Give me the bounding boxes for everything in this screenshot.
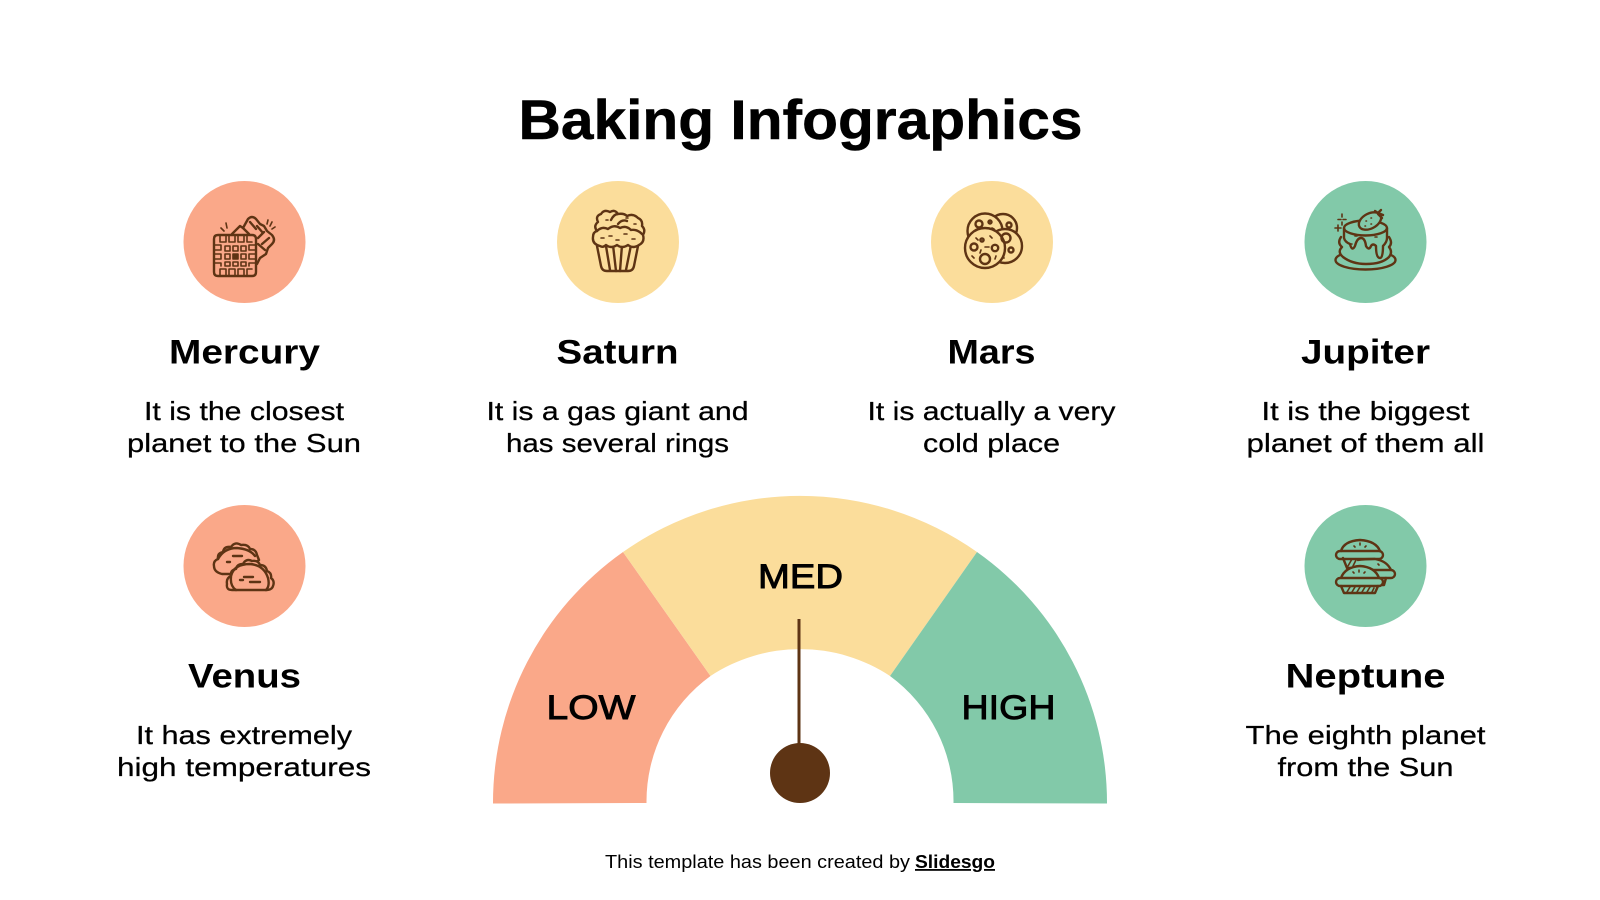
description: It is a gas giant and	[486, 396, 748, 426]
label: high: HIGH	[962, 689, 1056, 727]
heading: Venus	[188, 658, 301, 696]
icon: waffle	[184, 181, 306, 303]
icon: cookies	[931, 181, 1053, 303]
gauge segment: low	[493, 552, 710, 804]
description: The eighth planet	[1246, 720, 1486, 750]
icon: pies	[1304, 505, 1426, 627]
description line 2: high temperatures	[117, 752, 371, 782]
heading: Mercury	[169, 334, 320, 372]
panel: Jupiter	[1246, 181, 1484, 458]
icon: pancakes with strawberry	[1304, 181, 1426, 303]
footer credit	[605, 852, 995, 872]
description line 2: cold place	[923, 428, 1060, 458]
heading: Saturn	[556, 334, 678, 372]
heading: Jupiter	[1301, 334, 1430, 372]
heading: Neptune	[1286, 658, 1446, 696]
label: med: MED	[758, 558, 843, 596]
heading: Mars	[948, 334, 1036, 372]
panel: Saturn	[486, 181, 748, 458]
panel: Neptune	[1246, 505, 1486, 782]
panel: Mars	[868, 181, 1116, 458]
icon: dumplings	[184, 505, 306, 627]
gauge chart	[493, 496, 1107, 804]
description line 2: from the Sun	[1278, 752, 1454, 782]
panel: Mercury	[127, 181, 361, 458]
gauge segment: med	[623, 496, 977, 676]
footer link: Slidesgo	[915, 852, 995, 872]
gauge segment: high	[890, 552, 1107, 804]
description line 2: has several rings	[506, 428, 729, 458]
icon: muffin	[557, 181, 679, 303]
description: It is the closest	[144, 396, 345, 426]
label: low: LOW	[546, 689, 636, 727]
description: It has extremely	[136, 720, 352, 750]
title: Baking Infographics	[518, 88, 1082, 151]
gauge needle	[770, 619, 830, 803]
description: It is actually a very	[868, 396, 1116, 426]
footer text: This template has been created by	[605, 852, 910, 872]
description line 2: planet to the Sun	[127, 428, 361, 458]
description: It is the biggest	[1262, 396, 1470, 426]
panel: Venus	[117, 505, 371, 782]
description line 2: planet of them all	[1246, 428, 1484, 458]
